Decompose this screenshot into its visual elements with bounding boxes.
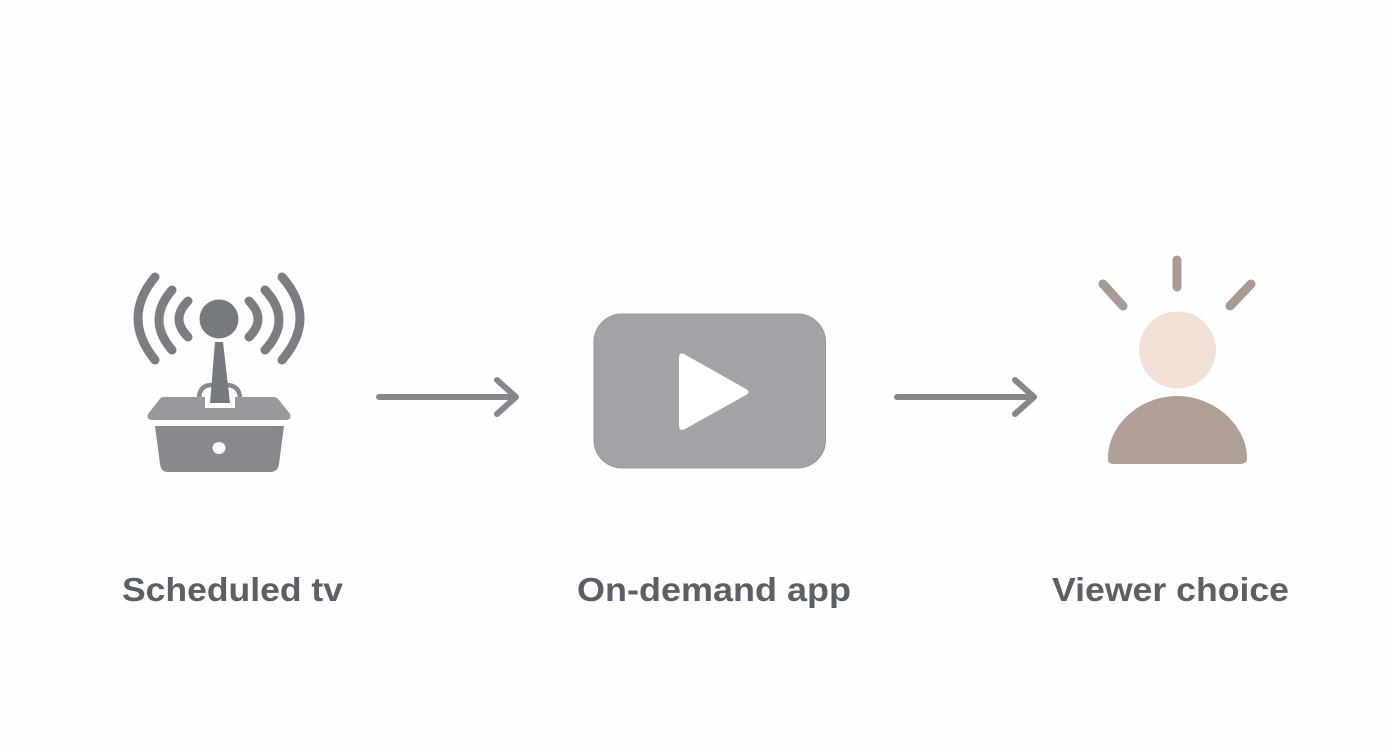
ray left [1103, 284, 1123, 306]
antenna ball [200, 300, 238, 338]
play triangle [679, 354, 748, 430]
icon: viewer with rays [1103, 260, 1251, 464]
label: Viewer choice: Viewer choice [1052, 571, 1289, 608]
icon: play button [594, 314, 826, 468]
icon: broadcast antenna [138, 277, 300, 472]
head [1139, 312, 1216, 388]
arrow: on-demand to viewer [897, 380, 1034, 414]
antenna mount [205, 393, 235, 408]
ray right [1230, 284, 1251, 306]
box lid [148, 397, 290, 420]
box body [155, 426, 284, 472]
shoulders [1108, 396, 1247, 464]
signal waves right [249, 277, 300, 360]
label: Scheduled tv: Scheduled tv [122, 571, 344, 608]
antenna mast [210, 342, 230, 403]
signal waves left [138, 277, 188, 360]
box button [212, 442, 226, 454]
rounded screen [594, 314, 826, 468]
ray center [1172, 260, 1182, 287]
antenna collar [199, 385, 240, 399]
label: On-demand app: On-demand app [577, 571, 851, 608]
arrow: scheduled to on-demand [379, 380, 516, 414]
